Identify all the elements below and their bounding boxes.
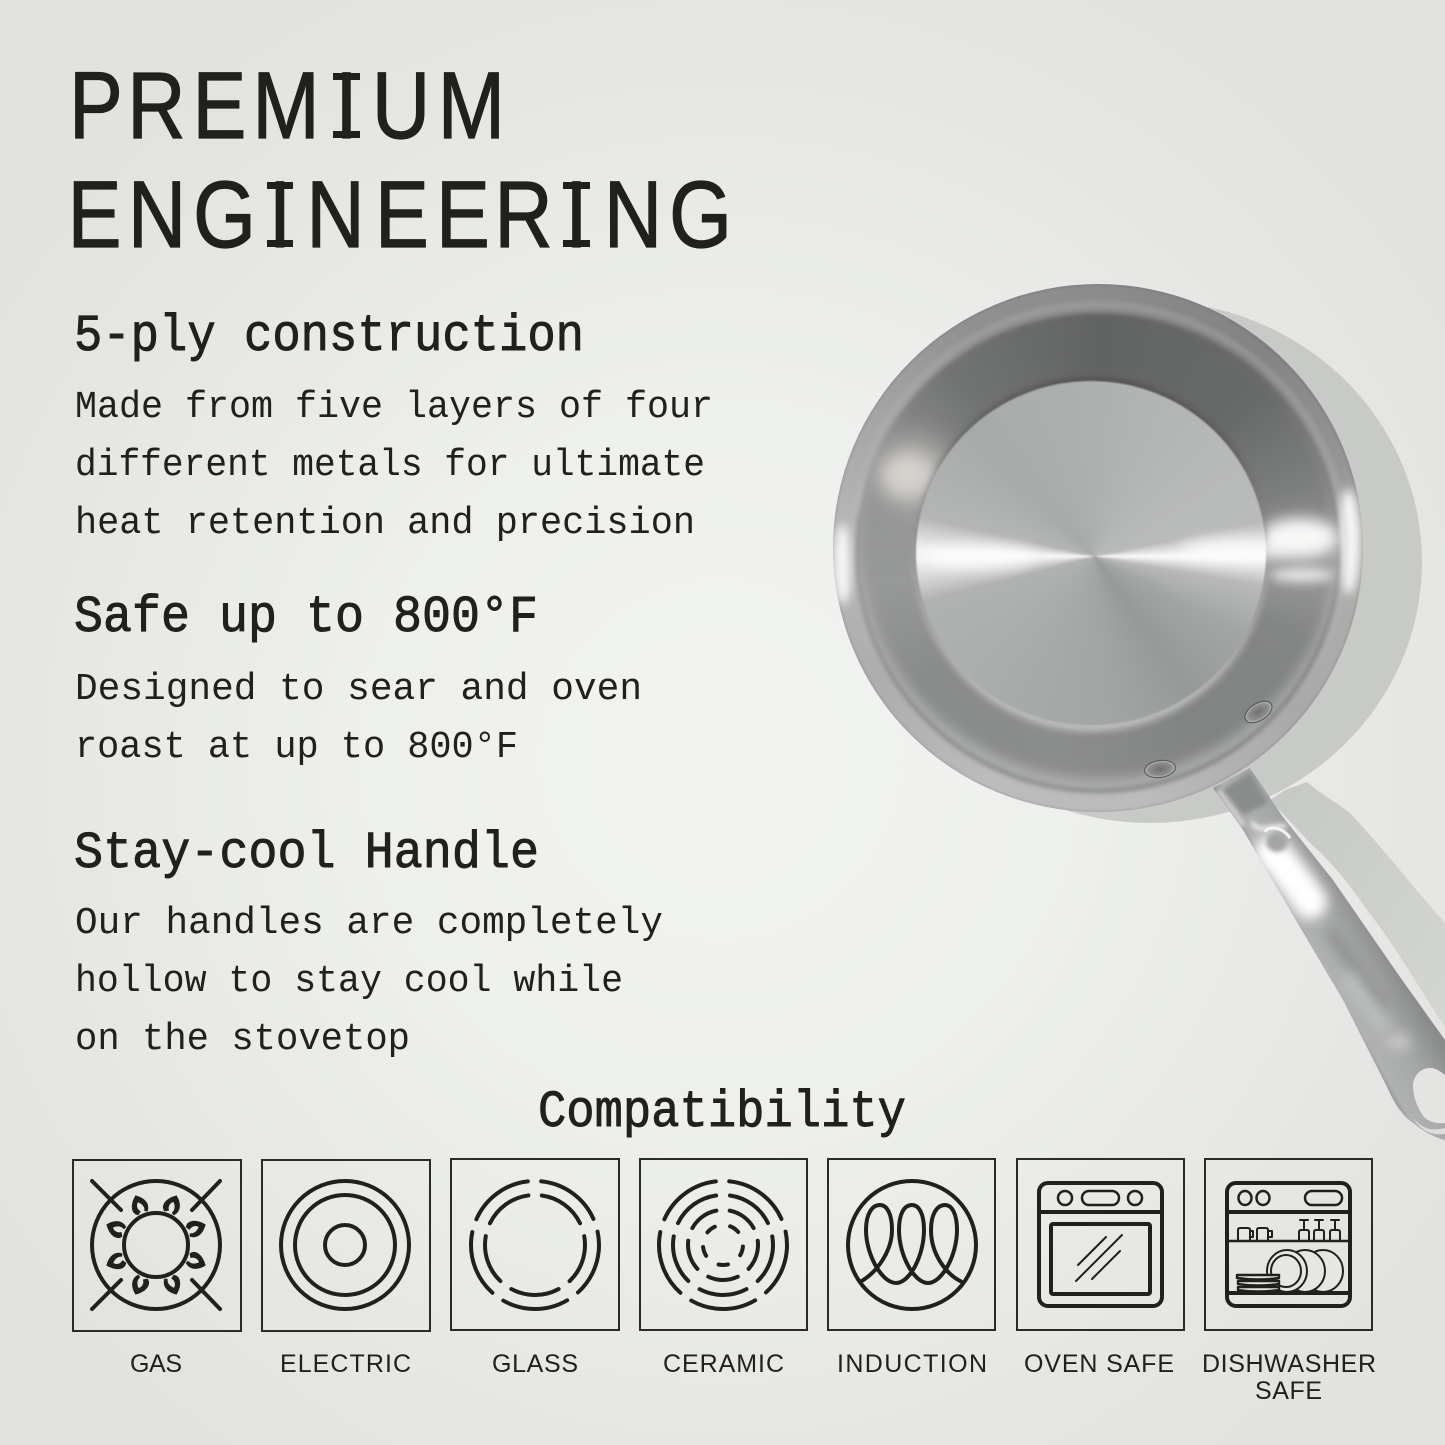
highlight: rim left [833,524,853,604]
glow: left streak [925,546,1035,568]
icon: dishwasher safe [1205,1159,1372,1330]
label: dishwasher safe: SAFE [1255,1377,1322,1405]
icon: glass [451,1159,619,1330]
shadow: handle [1270,782,1445,1027]
heading: compatibility: Compatibility [538,1083,906,1142]
feature: stay-cool handle: Our handles are completely [75,902,663,945]
label: induction: INDUCTION [837,1350,987,1378]
feature: stay-cool handle [74,824,663,1061]
feature: safe up to 800F: roast at up to 800°F [75,726,518,769]
glow: right streak [1180,538,1290,560]
label: ceramic: CERAMIC [663,1350,784,1378]
label: glass: GLASS [492,1350,578,1378]
icon: oven safe [1017,1159,1184,1330]
label: dishwasher safe: DISHWASHER [1202,1350,1376,1378]
pan shadow and handle [1066,306,1445,1140]
rivet: right [1241,696,1276,728]
label: dishwasher safe [1202,1350,1376,1405]
feature: 5-ply construction: heat retention and precision [75,502,695,545]
icon: induction [828,1159,995,1330]
highlight: rim upper left [856,478,884,520]
label: gas: GAS [130,1350,182,1378]
feature: safe up to 800F: Safe up to 800°F [74,588,538,647]
feature: 5-ply construction: 5-ply construction [74,307,584,366]
feature: 5-ply construction [74,307,713,545]
feature: stay-cool handle: on the stovetop [75,1018,410,1061]
title: PREMIUM [69,52,505,158]
title [68,52,732,267]
handle [1200,760,1445,1150]
highlight: wall right [1260,518,1340,558]
pan: lip ring [848,302,1348,794]
feature: safe up to 800F: Designed to sear and oven [75,668,642,711]
highlight: wall right lower reflection [1270,568,1335,582]
icon: electric [262,1160,430,1331]
highlight: rim right [1336,489,1360,594]
feature: stay-cool handle: hollow to stay cool while [75,960,623,1003]
reflection: wall bottom lip [851,309,1345,797]
pan: outer rim [833,284,1363,812]
highlight: wall left [883,453,935,497]
feature: stay-cool handle: Stay-cool Handle [74,824,539,883]
feature: 5-ply construction: different metals for ultimate [75,444,705,487]
feature: 5-ply construction: Made from five layers of four [75,386,713,429]
pan: floor [916,381,1266,725]
icon: gas [73,1160,241,1331]
haze: wall left [875,433,955,513]
title: ENGINEERING [68,161,732,267]
icon: ceramic [640,1159,807,1330]
rivet: left [1143,758,1177,780]
pan: inner wall [855,313,1341,793]
shadow: pan [878,301,1422,823]
feature: safe up to 800F [74,588,642,769]
label: oven safe: OVEN SAFE [1024,1350,1174,1378]
label: electric: ELECTRIC [280,1350,411,1378]
